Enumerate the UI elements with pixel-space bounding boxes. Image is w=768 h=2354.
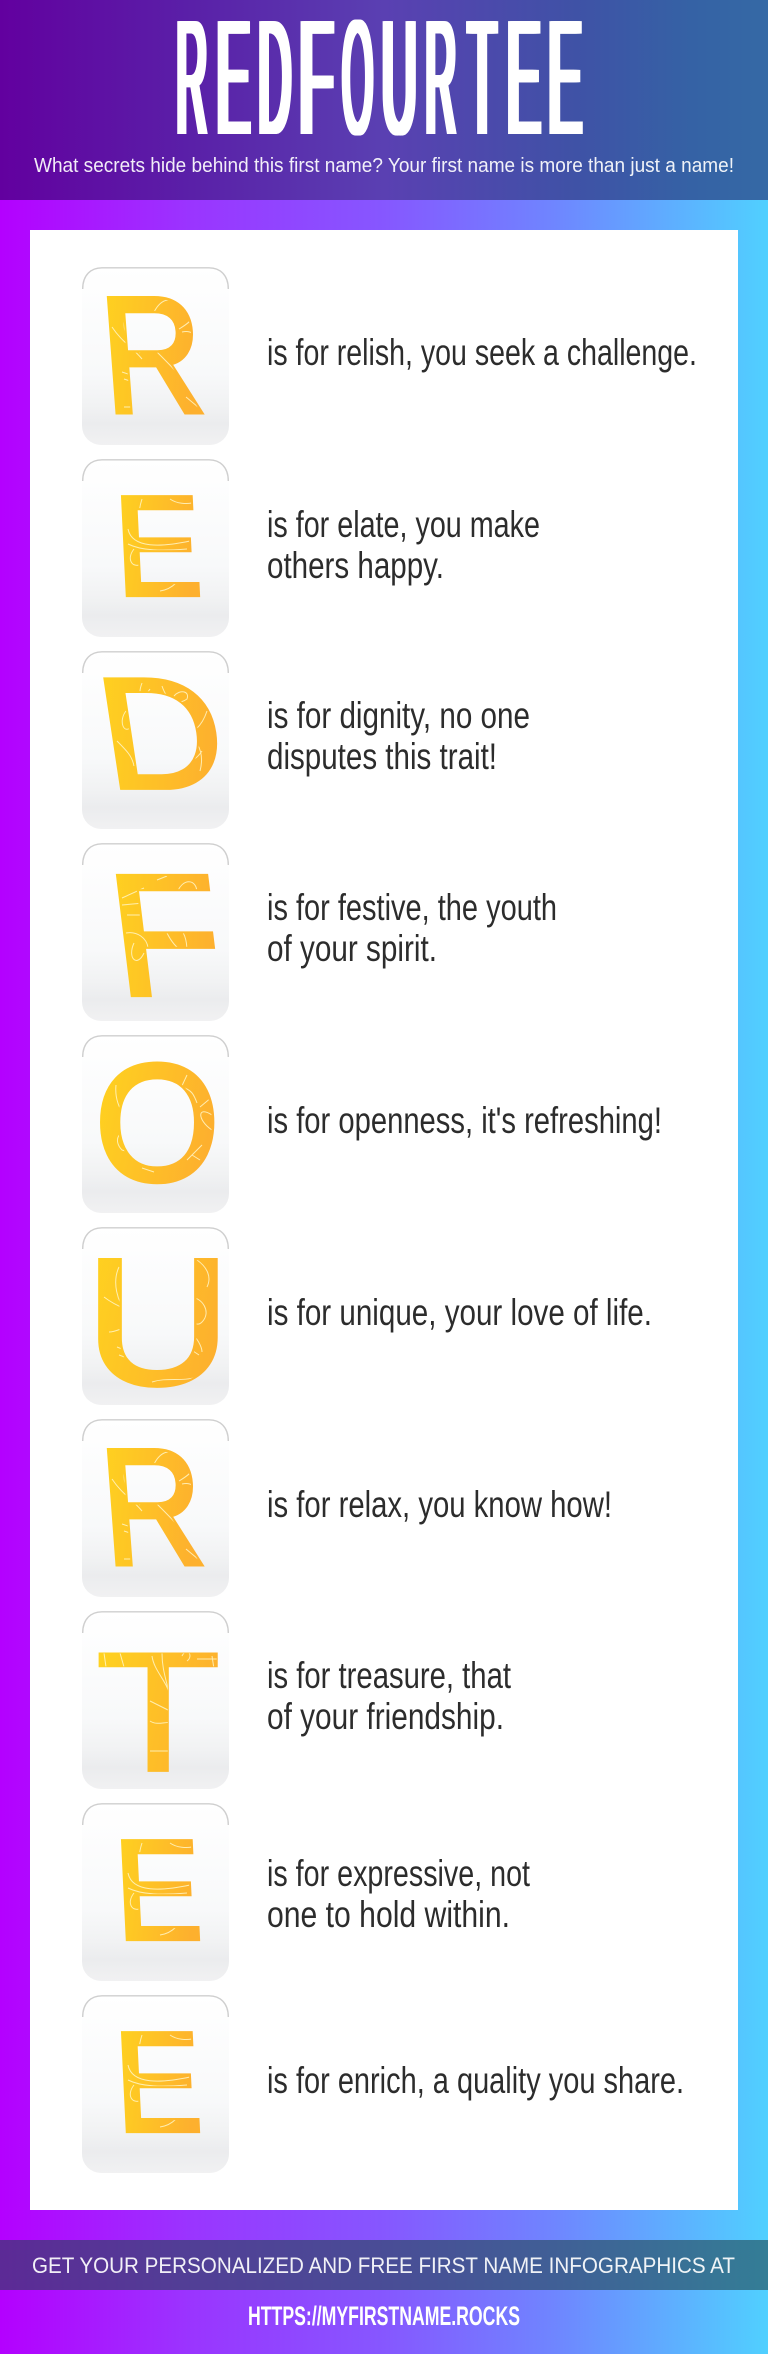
icon: letter E tile — [82, 459, 229, 637]
text: T meaning — [267, 1655, 512, 1737]
row: T — [82, 1611, 512, 1808]
text: T meaning: is for treasure, that — [267, 1655, 512, 1696]
icon: letter U tile: U — [85, 1221, 231, 1423]
text: E second meaning: one to hold within. — [267, 1894, 510, 1935]
row: R second — [82, 1415, 612, 1600]
text: F meaning: is for festive, the youth — [267, 887, 557, 928]
text: E meaning: is for elate, you make — [267, 504, 540, 545]
text: O meaning: is for openness, it's refreshing! — [267, 1100, 662, 1141]
footer call to action: GET YOUR PERSONALIZED AND FREE FIRST NAME INFOGRAPHICS AT — [32, 2253, 735, 2278]
text: D meaning: is for dignity, no one — [267, 695, 530, 736]
text: D meaning: disputes this trait! — [267, 736, 497, 777]
row: U — [82, 1221, 652, 1423]
row: O — [82, 1029, 662, 1216]
title — [177, 0, 583, 169]
row: F — [82, 839, 557, 1032]
icon: letter R tile: R — [95, 1415, 210, 1600]
text: T meaning: of your friendship. — [267, 1696, 504, 1737]
text: D meaning — [267, 695, 530, 777]
icon: letter T tile: T — [95, 1617, 221, 1808]
icon: letter E tile: E — [111, 2003, 205, 2161]
text: E second meaning — [267, 1853, 531, 1935]
text: R second meaning: is for relax, you know how! — [267, 1484, 612, 1525]
header band — [0, 0, 768, 200]
icon: letter E tile — [82, 1995, 229, 2173]
white content panel — [30, 230, 738, 2210]
subtitle: What secrets hide behind this first name? Your first name is more than just a name! — [34, 155, 734, 177]
icon: letter O tile: O — [95, 1029, 219, 1216]
text: E second meaning: is for expressive, not — [267, 1853, 531, 1894]
text: F meaning — [267, 887, 557, 969]
text: U meaning: is for unique, your love of life. — [267, 1292, 652, 1333]
icon: letter E tile: E — [111, 467, 205, 625]
icon: letter R tile: R — [95, 263, 210, 448]
text: E meaning: others happy. — [267, 545, 444, 586]
footer url: HTTPS://MYFIRSTNAME.ROCKS — [248, 2301, 520, 2331]
footer band — [0, 2240, 768, 2290]
row: R — [82, 263, 697, 448]
row: D — [82, 645, 530, 829]
icon: letter D tile: D — [86, 645, 236, 822]
icon: letter E tile: E — [111, 1811, 205, 1969]
text: E meaning — [267, 504, 540, 586]
icon: letter E tile — [82, 1803, 229, 1981]
row: E — [82, 459, 540, 637]
icon: letter F tile: F — [99, 839, 232, 1032]
row: E second — [82, 1803, 531, 1981]
text: F meaning: of your spirit. — [267, 928, 437, 969]
row: E third — [82, 1995, 684, 2173]
